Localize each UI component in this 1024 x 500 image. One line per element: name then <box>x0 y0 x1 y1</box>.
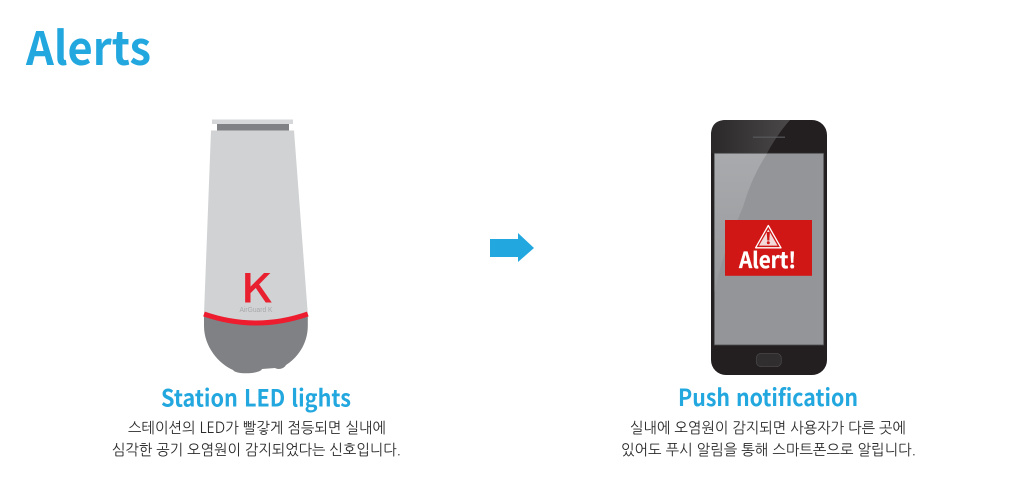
illustration: smartphone <box>711 120 827 375</box>
panel: station <box>112 120 401 458</box>
brand label: AirGuard K <box>240 307 273 314</box>
description: station <box>112 420 401 458</box>
title: Alerts <box>25 13 151 79</box>
panel: push notification <box>621 120 916 458</box>
screen <box>714 153 824 345</box>
description: push notification: 실내에 오염원이 감지되면 사용자가 다른 곳에 <box>630 420 906 436</box>
heading: push notification: Push notification <box>678 379 858 413</box>
phone body <box>711 120 827 375</box>
top glare <box>711 120 790 153</box>
illustration: station device <box>204 120 308 373</box>
description: station: 스테이션의 LED가 빨갛게 점등되면 실내에 <box>128 420 386 436</box>
device cap <box>212 120 293 124</box>
K logo: K <box>241 258 272 314</box>
description: push notification <box>621 420 916 458</box>
heading: station LED lights: Station LED lights <box>161 380 351 414</box>
red LED ring <box>204 314 308 323</box>
warning icon <box>756 226 781 248</box>
device body <box>204 130 308 323</box>
description: station: 심각한 공기 오염원이 감지되었다는 신호입니다. <box>112 442 401 458</box>
home button <box>756 353 781 367</box>
screen glare <box>715 154 767 292</box>
description: push notification: 있어도 푸시 알림을 통해 스마트폰으로 알립니다. <box>621 442 916 458</box>
device collar <box>217 124 289 130</box>
arrow <box>490 233 534 262</box>
alert text: Alert! <box>738 243 796 275</box>
alert banner <box>725 220 812 276</box>
device base <box>204 315 308 373</box>
speaker <box>753 137 785 138</box>
